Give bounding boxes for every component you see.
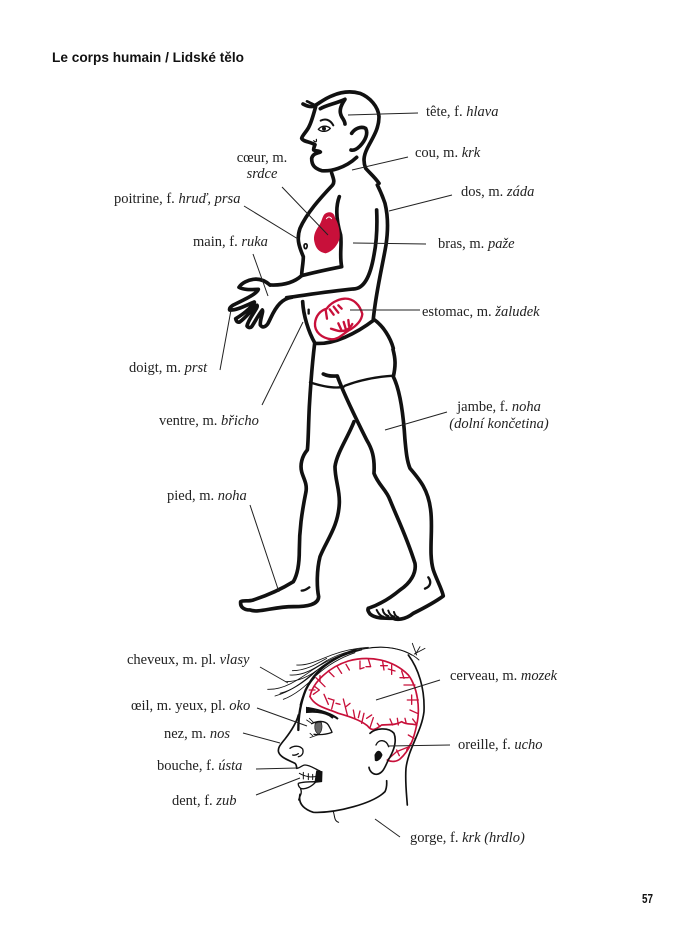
label: jambe: jambe, f. noha: [457, 399, 541, 415]
label: tête: tête, f. hlava: [426, 104, 498, 120]
label: bras: bras, m. paže: [438, 236, 515, 252]
face details: [278, 715, 332, 800]
label: estomac: estomac, m. žaludek: [422, 304, 540, 320]
head outline: [300, 655, 424, 822]
icon: stomach (red outline): [315, 299, 362, 339]
head of body: [302, 92, 379, 183]
label: doigt: doigt, m. prst: [129, 360, 208, 376]
label: main: main, f. ruka: [193, 234, 268, 250]
page number: 57: [642, 891, 653, 906]
lower body outline: [241, 343, 443, 619]
label: dos: dos, m. záda: [461, 184, 534, 200]
icon: heart (red): [314, 212, 340, 253]
label: nez: nez, m. nos: [164, 726, 230, 742]
label: jambe: (dolní končetina): [449, 416, 549, 432]
brain (red): [309, 659, 418, 761]
label: ventre: ventre, m. břicho: [159, 413, 259, 429]
hand: [230, 279, 292, 328]
label: cou: cou, m. krk: [415, 145, 481, 161]
label: oreille: oreille, f. ucho: [458, 737, 543, 753]
label: bouche: bouche, f. ústa: [157, 758, 242, 774]
hair: [268, 643, 425, 730]
leader lines: [220, 113, 452, 837]
label: pied: pied, m. noha: [167, 488, 247, 504]
label: gorge: gorge, f. krk (hrdlo): [410, 830, 525, 846]
label: cerveau: cerveau, m. mozek: [450, 668, 558, 684]
figure: head profile: [268, 643, 425, 822]
torso and arm: [270, 173, 393, 348]
label: œil: œil, m. yeux, pl. oko: [131, 698, 250, 714]
figure: full body outline: [230, 92, 443, 619]
eyebrow: [307, 708, 338, 719]
label: dent: dent, f. zub: [172, 793, 236, 809]
label: cœur: cœur, m.: [237, 150, 287, 166]
title: Le corps humain / Lidské tělo: [52, 49, 244, 65]
label: cœur: srdce: [247, 166, 278, 182]
label: poitrine: poitrine, f. hruď, prsa: [114, 191, 240, 207]
label: cheveux: cheveux, m. pl. vlasy: [127, 652, 250, 668]
